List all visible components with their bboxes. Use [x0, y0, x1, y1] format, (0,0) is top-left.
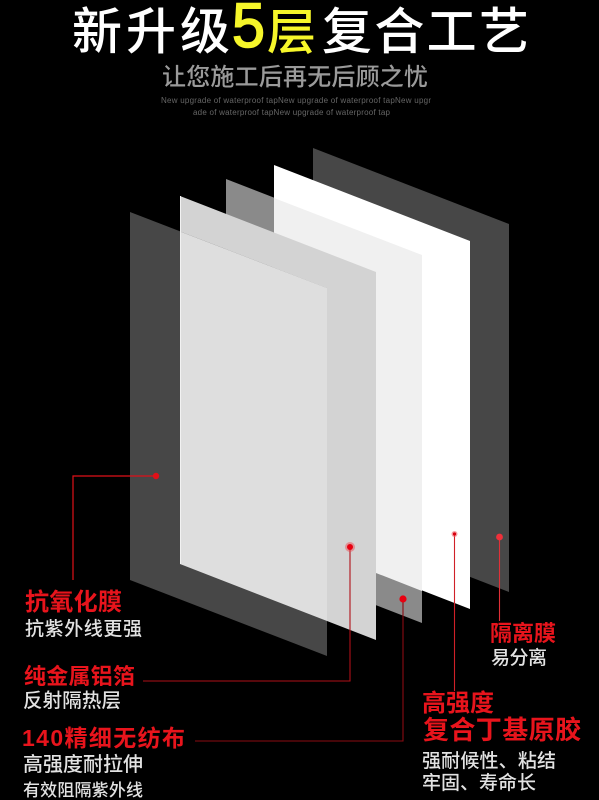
label: non-woven fabric: 140精细无纺布: [22, 725, 185, 751]
title: [72, 0, 529, 61]
label: isolation film: 易分离: [491, 647, 547, 669]
label: butyl adhesive: 强耐候性、粘结: [422, 750, 556, 772]
label: butyl adhesive: [422, 690, 581, 794]
callout: butyl adhesive leader: [452, 531, 458, 691]
layer: front film and foil intersection: [180, 232, 327, 621]
callout: isolation film leader: [496, 534, 503, 621]
label: butyl adhesive: 牢固、寿命长: [422, 771, 536, 794]
label: non-woven fabric: 有效阻隔紫外线: [23, 781, 143, 800]
title: 层: [267, 6, 316, 60]
callout: non-woven fabric leader: [195, 595, 407, 741]
English tagline: [161, 96, 431, 117]
layer: fabric over adhesive overlap: [274, 198, 422, 591]
label: aluminium foil: 纯金属铝箔: [24, 664, 135, 689]
foil left edge highlight: [180, 196, 182, 564]
layer: back isolation film: [313, 148, 509, 592]
layer: front oxidation film: [130, 212, 327, 656]
English tagline: New upgrade of waterproof tapNew upgrade of waterproof tapNew upgr: [161, 96, 431, 105]
title: 复合工艺: [322, 4, 529, 60]
English tagline: ade of waterproof tapNew upgrade of waterproof tap: [193, 108, 391, 117]
layered sheets diagram: [130, 148, 509, 656]
label: isolation film: [490, 621, 556, 669]
label: oxidation film: 抗氧化膜: [25, 589, 122, 616]
label: oxidation film: 抗紫外线更强: [25, 618, 142, 640]
label: aluminium foil: [23, 664, 135, 712]
layer: non-woven fabric: [226, 179, 422, 623]
label: non-woven fabric: [22, 725, 185, 800]
label: aluminium foil: 反射隔热层: [23, 690, 121, 712]
title: 新升级: [72, 4, 230, 60]
label: butyl adhesive: 高强度: [422, 690, 494, 717]
subtitle: 让您施工后再无后顾之忧: [162, 64, 428, 91]
label: oxidation film: [25, 589, 142, 640]
label: non-woven fabric: 高强度耐拉伸: [23, 753, 143, 776]
layer: foil strip above and beside the front film: [180, 196, 376, 640]
layer: butyl adhesive: [274, 165, 470, 609]
callout: oxidation film leader: [73, 473, 159, 580]
label: butyl adhesive: 复合丁基原胶: [423, 715, 581, 745]
callout: aluminium foil leader: [143, 542, 355, 681]
label: isolation film: 隔离膜: [490, 621, 556, 646]
